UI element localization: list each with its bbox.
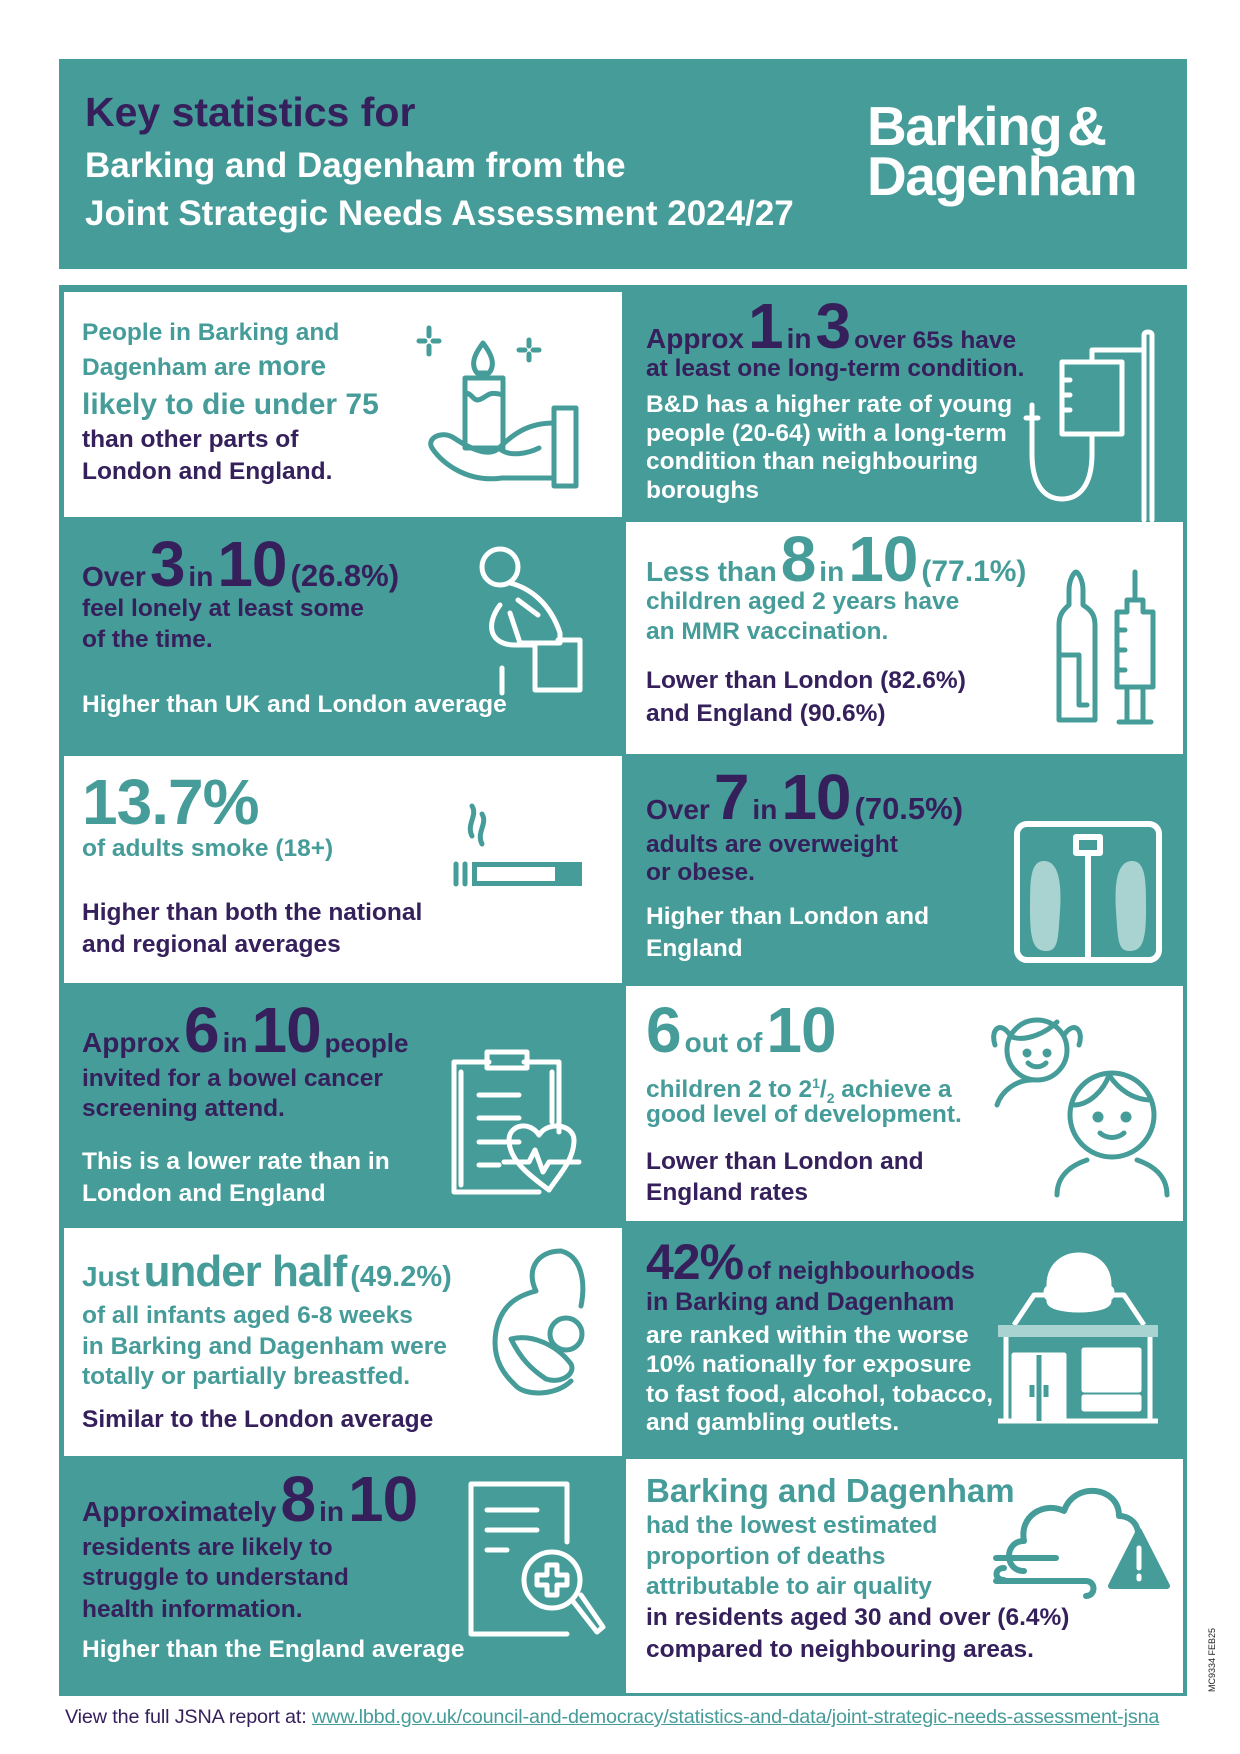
text: air quality: proportion of deaths: [646, 1543, 886, 1570]
text: premature death: People in Barking and: [82, 319, 339, 346]
text: loneliness: (26.8%): [290, 558, 399, 593]
text: fast food exposure: of neighbourhoods: [747, 1257, 975, 1285]
text: health literacy: struggle to understand: [82, 1564, 349, 1591]
icon: mother breastfeeding: [492, 1248, 586, 1396]
text: MMR vaccination: Lower than London (82.6%): [646, 667, 966, 694]
text: MMR vaccination: 8: [781, 523, 815, 595]
text: loneliness: 3: [150, 528, 184, 600]
text: child development: England rates: [646, 1179, 808, 1206]
text: bowel screening: Approx: [82, 1027, 180, 1058]
text: bowel screening: in: [223, 1027, 247, 1058]
text: MMR vaccination: (77.1%): [921, 555, 1026, 588]
panel: premature death: [64, 292, 622, 517]
text: fast food exposure: [646, 1234, 993, 1436]
text: overweight: 7: [714, 761, 748, 833]
text: fast food exposure: 42%: [646, 1234, 743, 1290]
text: smoking: [82, 766, 422, 958]
text: premature death: London and England.: [82, 458, 332, 485]
text: overweight: [646, 761, 963, 962]
text: loneliness: Over: [82, 561, 146, 592]
text: overweight: England: [646, 935, 743, 962]
panel: fast food exposure: [646, 1234, 1158, 1436]
text: loneliness: 10: [217, 528, 286, 600]
panel: breastfeeding: [64, 1228, 622, 1456]
text: health literacy: in: [319, 1496, 344, 1527]
text: overweight: adults are overweight: [646, 831, 898, 858]
text: overweight: (70.5%): [854, 791, 963, 826]
icon: IV drip: [1024, 330, 1154, 522]
text: breastfeeding: under half: [144, 1247, 346, 1296]
text: health literacy: health information.: [82, 1596, 302, 1623]
text: overweight: in: [752, 794, 777, 825]
text: health literacy: Approximately: [82, 1496, 276, 1527]
text: smoking: and regional averages: [82, 931, 341, 958]
text: bowel screening: London and England: [82, 1180, 326, 1207]
text: child development: children 2 to 21/2 achieve a: [646, 1075, 952, 1106]
panel: MMR vaccination: [626, 522, 1183, 754]
panel: loneliness: [82, 528, 582, 718]
text: premature death: [82, 319, 379, 485]
text: air quality: in residents aged 30 and over (6.4%): [646, 1604, 1069, 1631]
icon: fast food shop: [998, 1252, 1158, 1424]
text: bowel screening: 10: [251, 994, 321, 1066]
text: long-term conditions: in: [787, 323, 811, 354]
text: loneliness: Higher than UK and London average: [82, 691, 507, 718]
text: breastfeeding: Just: [82, 1261, 140, 1292]
text: air quality: had the lowest estimated: [646, 1512, 937, 1539]
text: MMR vaccination: children aged 2 years have: [646, 588, 959, 615]
text: loneliness: in: [188, 561, 213, 592]
text: bowel screening: 6: [184, 994, 219, 1066]
text: premature death: likely to die under 75: [82, 388, 379, 421]
panel: long-term conditions: [646, 290, 1154, 522]
text: bowel screening: screening attend.: [82, 1095, 285, 1122]
text: child development: [646, 994, 962, 1206]
text: long-term conditions: over 65s have: [854, 327, 1016, 354]
icon: candle in hand: [416, 326, 578, 488]
text: health literacy: residents are likely to: [82, 1534, 333, 1561]
logo: Dagenham: [867, 145, 1136, 207]
text: health literacy: 10: [348, 1463, 417, 1535]
text: breastfeeding: totally or partially breastfed.: [82, 1363, 410, 1390]
text: MMR vaccination: 10: [848, 523, 917, 595]
text: MMR vaccination: Less than: [646, 556, 777, 587]
icon: vial and syringe: [1056, 570, 1156, 724]
panel: smoking: [64, 756, 622, 983]
text: bowel screening: invited for a bowel cancer: [82, 1065, 383, 1092]
icon: clipboard with heart: [452, 1050, 582, 1194]
text: long-term conditions: people (20-64) with a long-term: [646, 420, 1007, 447]
text: child development: good level of development.: [646, 1101, 962, 1128]
logo: Barking&: [867, 95, 1106, 157]
title: Key statistics for: [85, 89, 415, 135]
text: air quality: Barking and Dagenham: [646, 1472, 1015, 1509]
text: smoking: Higher than both the national: [82, 899, 422, 926]
text: MMR vaccination: and England (90.6%): [646, 700, 886, 727]
text: breastfeeding: [82, 1247, 452, 1433]
text: child development: Lower than London and: [646, 1148, 924, 1175]
text: bowel screening: This is a lower rate than in: [82, 1148, 390, 1175]
header banner: [59, 59, 1187, 269]
text: bowel screening: [82, 994, 408, 1207]
panel: health literacy: [82, 1463, 606, 1663]
icon: two children: [991, 1018, 1170, 1198]
text: health literacy: 8: [280, 1463, 315, 1535]
text: long-term conditions: 1: [748, 290, 783, 362]
text: MMR vaccination: in: [819, 556, 844, 587]
text: child development: 10: [766, 994, 836, 1066]
text: long-term conditions: at least one long-term condition.: [646, 355, 1024, 382]
text: MMR vaccination: [646, 523, 1026, 727]
footer: report link: View the full JSNA report at: www.lbbd.gov.uk/council-and-democracy/statistics-and-data/joint-strategic-needs-assessment-jsna: [65, 1706, 1159, 1728]
text: overweight: Higher than London and: [646, 903, 929, 930]
text: air quality: [646, 1472, 1069, 1663]
panel: air quality: [626, 1459, 1183, 1693]
panel: overweight: [646, 761, 1162, 963]
text: loneliness: of the time.: [82, 626, 213, 653]
stats grid: [59, 285, 1187, 1696]
icon: document with magnifier: [468, 1482, 606, 1636]
text: long-term conditions: boroughs: [646, 477, 759, 504]
text: premature death: than other parts of: [82, 426, 298, 453]
text: breastfeeding: (49.2%): [350, 1261, 452, 1293]
text: long-term conditions: B&D has a higher rate of young: [646, 391, 1012, 418]
text: fast food exposure: in Barking and Dagenham: [646, 1288, 954, 1316]
panel: child development: [626, 986, 1183, 1221]
print code: MC9334 FEB25: [1207, 1628, 1217, 1692]
text: long-term conditions: [646, 290, 1024, 504]
text: fast food exposure: to fast food, alcohol, tobacco,: [646, 1381, 993, 1408]
panel: bowel cancer screening: [82, 994, 582, 1207]
text: health literacy: Higher than the England average: [82, 1636, 465, 1663]
title: [85, 89, 794, 233]
text: loneliness: feel lonely at least some: [82, 595, 364, 622]
icon: cigarette: [454, 804, 582, 886]
text: bowel screening: people: [325, 1028, 408, 1058]
icon: polluted cloud with warning: [993, 1488, 1170, 1599]
title: Joint Strategic Needs Assessment 2024/27: [85, 194, 794, 233]
text: long-term conditions: Approx: [646, 323, 744, 354]
text: child development: 6: [646, 994, 681, 1066]
text: breastfeeding: Similar to the London average: [82, 1406, 433, 1433]
text: smoking: 13.7%: [82, 766, 258, 838]
text: premature death: Dagenham are more: [82, 350, 326, 381]
text: child development: out of: [685, 1027, 762, 1058]
text: MMR vaccination: an MMR vaccination.: [646, 618, 888, 645]
text: fast food exposure: and gambling outlets.: [646, 1409, 899, 1436]
text: fast food exposure: are ranked within the worse: [646, 1322, 969, 1349]
logo: [867, 95, 1136, 207]
text: long-term conditions: 3: [815, 290, 850, 362]
text: air quality: compared to neighbouring areas.: [646, 1636, 1034, 1663]
text: overweight: or obese.: [646, 859, 755, 886]
text: air quality: attributable to air quality: [646, 1573, 932, 1600]
text: overweight: 10: [781, 761, 850, 833]
title: Barking and Dagenham from the: [85, 146, 626, 185]
text: breastfeeding: of all infants aged 6-8 weeks: [82, 1302, 413, 1329]
icon: lonely person sitting: [480, 546, 582, 696]
text: overweight: Over: [646, 794, 710, 825]
text: loneliness: [82, 528, 507, 718]
text: smoking: of adults smoke (18+): [82, 835, 333, 862]
icon: weighing scales: [1014, 821, 1162, 963]
text: fast food exposure: 10% nationally for exposure: [646, 1351, 971, 1378]
text: breastfeeding: in Barking and Dagenham were: [82, 1333, 447, 1360]
text: health literacy: [82, 1463, 465, 1663]
text: long-term conditions: condition than neighbouring: [646, 448, 978, 475]
